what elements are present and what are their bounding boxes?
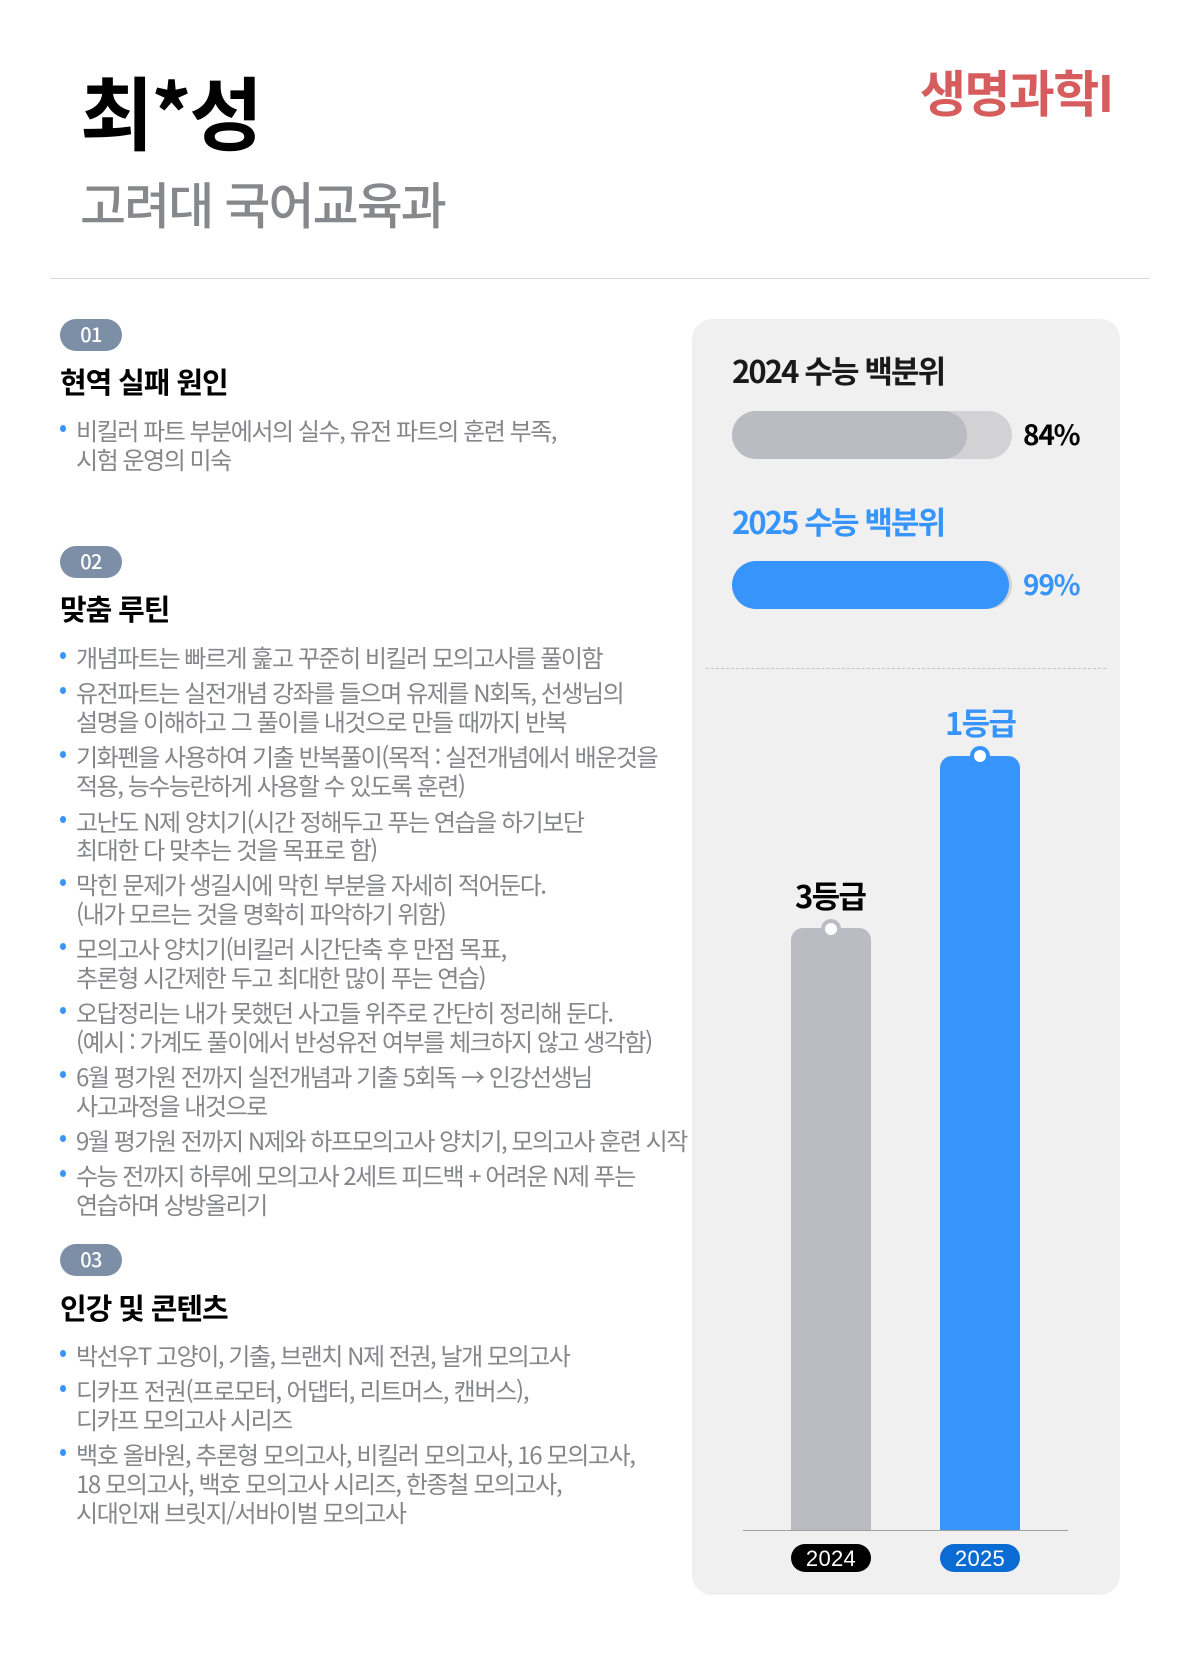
label: 1등급: 1등급: [945, 699, 1015, 744]
subtitle: university: 고려대 국어교육과: [80, 167, 445, 239]
dashed divider: [706, 668, 1106, 669]
subject label: 생명과학I: [920, 55, 1112, 127]
section 01 text: 비킬러 파트 부분에서의 실수, 유전 파트의 훈련 부족,: [76, 412, 556, 447]
section 02 list: 설명을 이해하고 그 풀이를 내것으로 만들 때까지 반복: [76, 703, 566, 738]
progress bar: 2024 84%: [732, 411, 1012, 459]
chart baseline: [743, 1530, 1068, 1531]
section 02 list: (내가 모르는 것을 명확히 파악하기 위함): [76, 895, 445, 930]
section 03 list: 디카프 전권(프로모터, 어댑터, 리트머스, 캔버스),: [76, 1372, 528, 1407]
header divider: [50, 278, 1150, 279]
axis label: 2025: [940, 1544, 1020, 1572]
section 02 list: 9월 평가원 전까지 N제와 하프모의고사 양치기, 모의고사 훈련 시작: [76, 1122, 687, 1157]
bar: 2025 grade: [940, 756, 1020, 1530]
section 03 list: 18 모의고사, 백호 모의고사 시리즈, 한종철 모의고사,: [76, 1465, 561, 1500]
section 01 badge: 01: [80, 319, 102, 348]
section 03 list: 박선우T 고양이, 기출, 브랜치 N제 전권, 날개 모의고사: [76, 1337, 569, 1372]
section 02 badge: 02: [80, 546, 102, 575]
section 02 list: 유전파트는 실전개념 강좌를 들으며 유제를 N회독, 선생님의: [76, 674, 623, 709]
section 02 list: 기화펜을 사용하여 기출 반복풀이(목적 : 실전개념에서 배운것을: [76, 738, 657, 773]
section 02 list: 막힌 문제가 생길시에 막힌 부분을 자세히 적어둔다.: [76, 866, 546, 901]
section 03 heading: 인강 및 콘텐츠: [60, 1286, 228, 1328]
section 02 list: 오답정리는 내가 못했던 사고들 위주로 간단히 정리해 둔다.: [76, 994, 613, 1029]
axis label: 2024: 2024: [806, 1546, 856, 1571]
bar: 2024 grade: [791, 928, 871, 1530]
section 03 list: 백호 올바원, 추론형 모의고사, 비킬러 모의고사, 16 모의고사,: [76, 1436, 635, 1471]
section 02 list: 최대한 다 맞추는 것을 목표로 함): [76, 831, 377, 866]
section 02 list: (예시 : 가계도 풀이에서 반성유전 여부를 체크하지 않고 생각함): [76, 1023, 652, 1058]
section 03 list: 시대인재 브릿지/서바이벌 모의고사: [76, 1494, 406, 1529]
progress bar: 2025 99%: [732, 561, 1012, 609]
value: 99%: 99%: [1023, 564, 1079, 604]
section 02 list: [60, 639, 688, 1221]
section 02 list: 6월 평가원 전까지 실전개념과 기출 5회독 → 인강선생님: [76, 1058, 592, 1093]
section 02 badge: [60, 546, 122, 578]
section 03 badge: [60, 1244, 122, 1276]
section 02 list: 추론형 시간제한 두고 최대한 많이 푸는 연습): [76, 959, 485, 994]
marker: 2024 bar: [821, 919, 841, 939]
section 02 list: 개념파트는 빠르게 훑고 꾸준히 비킬러 모의고사를 풀이함: [76, 639, 602, 674]
section 02 heading: 맞춤 루틴: [60, 587, 169, 629]
section 02 list: 모의고사 양치기(비킬러 시간단축 후 만점 목표,: [76, 930, 506, 965]
section 03 list: 디카프 모의고사 시리즈: [76, 1401, 292, 1436]
label: 2024 percentile: 2024 수능 백분위: [732, 347, 944, 392]
panel: score comparison: [692, 319, 1120, 1595]
section 03 list: [60, 1337, 635, 1529]
section 02 list: 연습하며 상방올리기: [76, 1186, 267, 1221]
label: 3등급: 3등급: [795, 872, 865, 917]
section 01 text: [60, 412, 556, 476]
title: student name: 최*성: [80, 52, 261, 168]
value: 84%: 84%: [1023, 414, 1079, 454]
axis label: 2024: [791, 1544, 871, 1572]
section 02 list: 적용, 능수능란하게 사용할 수 있도록 훈련): [76, 767, 464, 802]
section 01 text: 시험 운영의 미숙: [76, 441, 231, 476]
section 01 heading: 현역 실패 원인: [60, 360, 228, 402]
section 02 list: 고난도 N제 양치기(시간 정해두고 푸는 연습을 하기보단: [76, 803, 583, 838]
section 02 list: 사고과정을 내것으로: [76, 1087, 267, 1122]
section 03 badge: 03: [80, 1244, 102, 1273]
marker: 2025 bar: [970, 746, 990, 766]
section 01 badge: [60, 319, 122, 351]
label: 2025 percentile: 2025 수능 백분위: [732, 498, 944, 543]
axis label: 2025: 2025: [955, 1546, 1005, 1571]
section 02 list: 수능 전까지 하루에 모의고사 2세트 피드백 + 어려운 N제 푸는: [76, 1157, 635, 1192]
